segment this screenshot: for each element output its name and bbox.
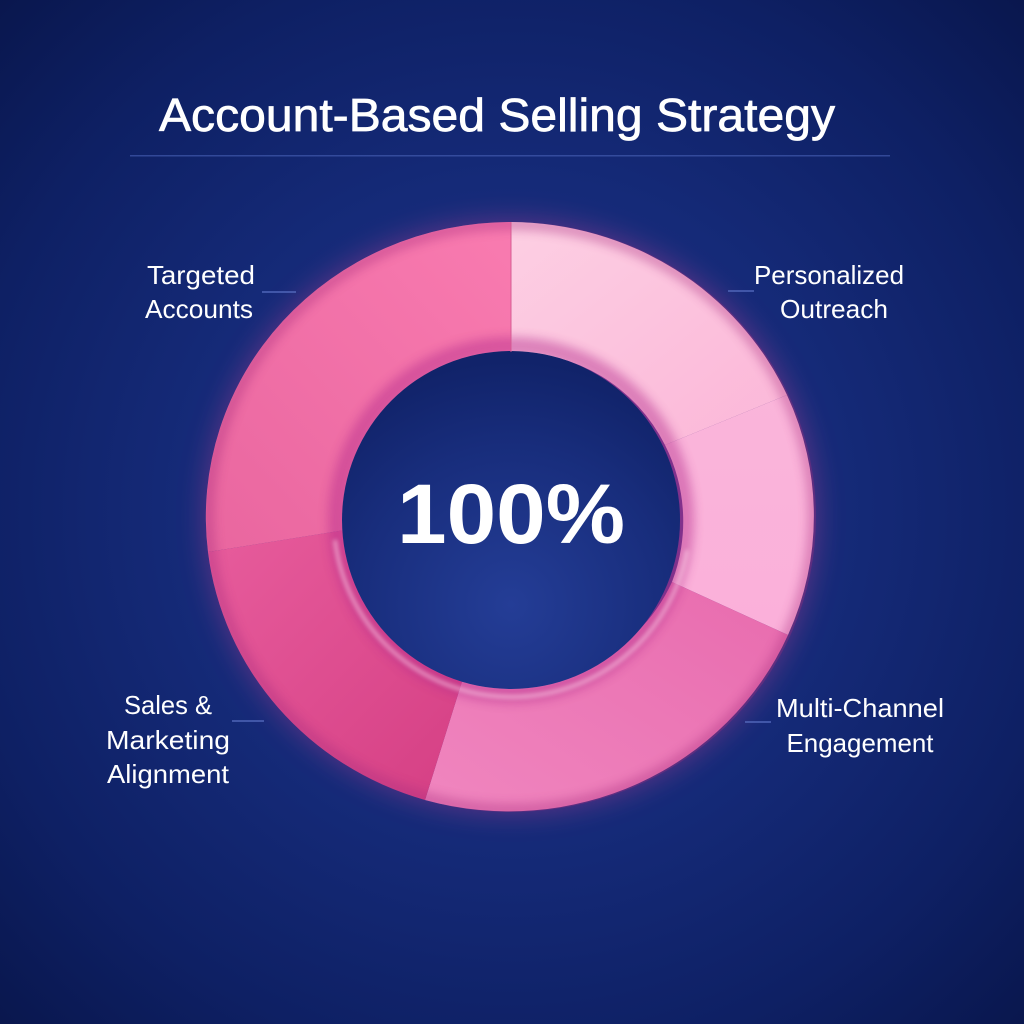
ring shading xyxy=(208,224,814,810)
label: sales and marketing alignment: Sales & xyxy=(124,690,212,720)
label: targeted accounts: Targeted xyxy=(147,260,255,290)
label: sales and marketing alignment xyxy=(106,690,264,789)
segment: personalized outreach xyxy=(511,222,787,445)
center hole xyxy=(342,351,680,689)
label: personalized outreach: Outreach xyxy=(780,294,888,324)
segment: light pink right xyxy=(665,395,814,635)
title underline xyxy=(130,155,890,156)
segment divider top xyxy=(510,222,512,352)
segment: sales and marketing alignment xyxy=(208,530,465,800)
bottom edge shading xyxy=(208,224,814,810)
inner rim shading xyxy=(337,346,685,694)
title: Account-Based Selling Strategy xyxy=(159,89,835,141)
label: targeted accounts xyxy=(145,260,296,324)
label: personalized outreach xyxy=(728,260,904,324)
label: multi-channel engagement xyxy=(745,693,944,758)
segment: multi-channel engagement xyxy=(425,582,788,811)
lower inner highlight xyxy=(335,540,687,697)
segment: targeted accounts xyxy=(206,222,511,552)
label: sales and marketing alignment: Alignment xyxy=(107,759,230,789)
label: sales and marketing alignment: Marketing xyxy=(106,725,230,755)
label: targeted accounts: Accounts xyxy=(145,294,253,324)
label: multi-channel engagement: Multi-Channel xyxy=(776,693,944,723)
center value: 100% xyxy=(397,467,625,561)
label: personalized outreach: Personalized xyxy=(754,260,904,290)
donut glow xyxy=(205,221,817,813)
donut chart xyxy=(205,221,817,813)
label: multi-channel engagement: Engagement xyxy=(786,728,934,758)
